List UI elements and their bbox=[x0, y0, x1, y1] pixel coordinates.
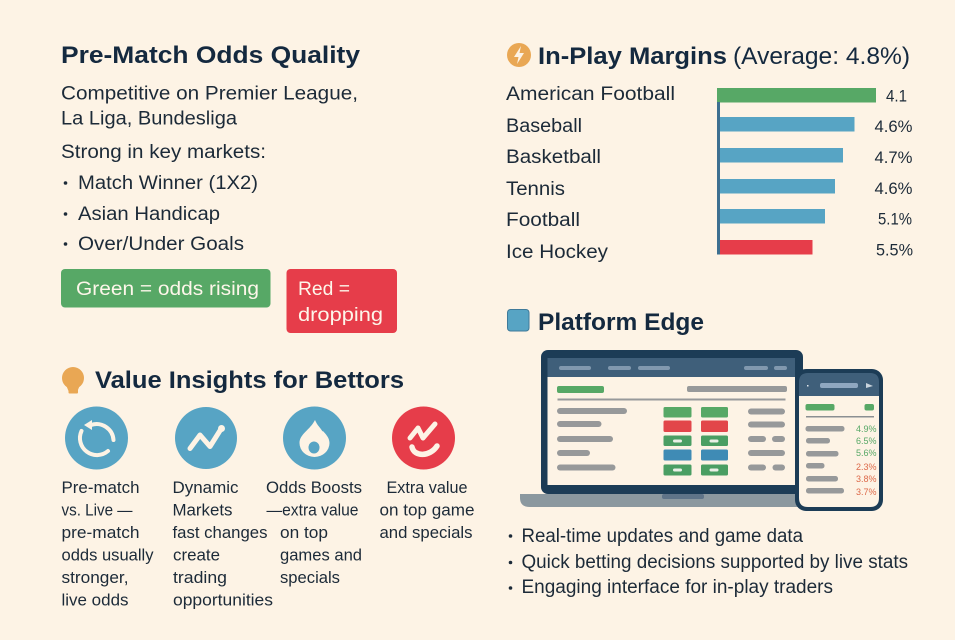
illustration: phone: 5.6% bbox=[856, 448, 877, 458]
text block: pre-match vs live: stronger, bbox=[62, 569, 128, 587]
bullet list: platform features: Engaging interface for in-play traders bbox=[522, 577, 833, 598]
text block: odds boosts: —extra value bbox=[266, 502, 358, 520]
heading: value insights: Value Insights for Bettors bbox=[95, 367, 404, 394]
icon: lightning bolt bbox=[507, 43, 531, 67]
text block: pre-match vs live: Pre-match bbox=[62, 479, 140, 497]
text block: odds boosts: on top bbox=[280, 524, 328, 542]
bullet list: platform features: Quick betting decisions supported by live stats bbox=[522, 552, 908, 573]
text block: extra value: and specials bbox=[380, 524, 472, 542]
text block: competitive leagues: La Liga, Bundesliga bbox=[61, 108, 237, 130]
legend: red dropping bbox=[286, 269, 397, 333]
text block: pre-match vs live: odds usually bbox=[62, 546, 154, 564]
illustration: phone: 3.7% bbox=[856, 487, 877, 497]
text block: strong in key markets: Strong in key markets: bbox=[61, 142, 266, 163]
row: Basketball bbox=[506, 147, 913, 168]
heading: in-play margins: In-Play Margins bbox=[538, 43, 727, 70]
text block: competitive leagues bbox=[61, 84, 358, 130]
row: Baseball bbox=[506, 116, 913, 137]
illustration: phone: 2.3% bbox=[856, 462, 877, 472]
panel: platform edge bbox=[508, 309, 908, 598]
text block: pre-match vs live: pre-match bbox=[62, 524, 140, 542]
panel: pre-match odds quality bbox=[61, 42, 397, 333]
illustration: phone bbox=[795, 369, 883, 511]
row: Baseball: 4.6% bbox=[874, 118, 913, 136]
panel: value insights for bettors bbox=[62, 367, 474, 610]
heading: platform edge: Platform Edge bbox=[538, 309, 704, 336]
bullet list: platform features bbox=[509, 526, 908, 598]
row: Tennis bbox=[506, 179, 913, 200]
bullet list: key markets: Match Winner (1X2) bbox=[78, 173, 258, 194]
row: American Football: American Football bbox=[506, 84, 675, 105]
text block: pre-match vs live: live odds bbox=[62, 592, 128, 610]
row: Tennis: 4.6% bbox=[874, 180, 913, 198]
text block: competitive leagues: Competitive on Premier League, bbox=[61, 84, 358, 104]
icon: trend line bbox=[175, 407, 237, 469]
legend: red dropping: dropping bbox=[298, 305, 383, 326]
text block: odds boosts: Odds Boosts bbox=[266, 479, 362, 497]
text block: extra value: on top game bbox=[380, 502, 474, 520]
illustration: laptop bbox=[520, 350, 812, 507]
illustration: phone: 4.9% bbox=[856, 424, 877, 434]
illustration: phone: 6.5% bbox=[856, 436, 877, 446]
row: Basketball: Basketball bbox=[506, 147, 601, 168]
text block: dynamic markets: create bbox=[173, 546, 220, 564]
bullet list: key markets: Over/Under Goals bbox=[78, 234, 244, 255]
icon: refresh arrows bbox=[65, 406, 128, 470]
heading: in-play margins: (Average: 4.8%) bbox=[733, 43, 910, 70]
heading: pre-match odds quality: Pre-Match Odds Quality bbox=[61, 42, 361, 69]
text block: extra value: Extra value bbox=[386, 479, 468, 497]
text block: dynamic markets: opportunities bbox=[173, 592, 273, 610]
bullet list: key markets: Asian Handicap bbox=[78, 204, 220, 225]
bar chart: margins by sport bbox=[506, 84, 913, 263]
text block: dynamic markets bbox=[172, 479, 273, 610]
text block: dynamic markets: fast changes bbox=[172, 524, 268, 542]
bullet list: key markets bbox=[64, 173, 258, 255]
row: Tennis: Tennis bbox=[506, 179, 565, 200]
illustration: phone: 3.8% bbox=[856, 474, 877, 484]
icon: red trend and smile bbox=[392, 406, 455, 470]
legend: red dropping: Red = bbox=[298, 279, 350, 300]
text block: pre-match vs live bbox=[62, 479, 154, 610]
text block: extra value bbox=[380, 479, 474, 542]
text block: odds boosts bbox=[266, 479, 362, 587]
row: Ice Hockey: 5.5% bbox=[876, 242, 913, 260]
row: Baseball: Baseball bbox=[506, 116, 582, 137]
legend: green odds rising: Green = odds rising bbox=[76, 279, 259, 300]
row: American Football: 4.1 bbox=[886, 88, 907, 106]
bullet list: platform features: Real-time updates and game data bbox=[522, 526, 803, 547]
row: Basketball: 4.7% bbox=[874, 149, 913, 167]
text block: odds boosts: specials bbox=[280, 569, 340, 587]
text block: dynamic markets: trading bbox=[173, 569, 227, 587]
row: American Football bbox=[506, 84, 907, 106]
panel: in-play margins bbox=[506, 43, 913, 263]
text block: dynamic markets: Markets bbox=[172, 502, 232, 520]
text block: dynamic markets: Dynamic bbox=[172, 479, 238, 497]
icon: droplet bbox=[283, 406, 346, 470]
icon: blue square bbox=[508, 310, 529, 331]
row: Ice Hockey bbox=[506, 240, 913, 263]
chart axis bbox=[717, 102, 720, 254]
icon: lightbulb bbox=[62, 367, 84, 394]
text block: odds boosts: games and bbox=[280, 546, 362, 564]
row: Ice Hockey: Ice Hockey bbox=[506, 242, 609, 263]
heading: in-play margins bbox=[538, 43, 910, 70]
row: Football bbox=[506, 209, 912, 231]
text block: pre-match vs live: vs. Live — bbox=[62, 502, 133, 520]
legend: green odds rising bbox=[61, 269, 270, 308]
row: Football: Football bbox=[506, 210, 580, 231]
row: Football: 5.1% bbox=[878, 210, 912, 228]
